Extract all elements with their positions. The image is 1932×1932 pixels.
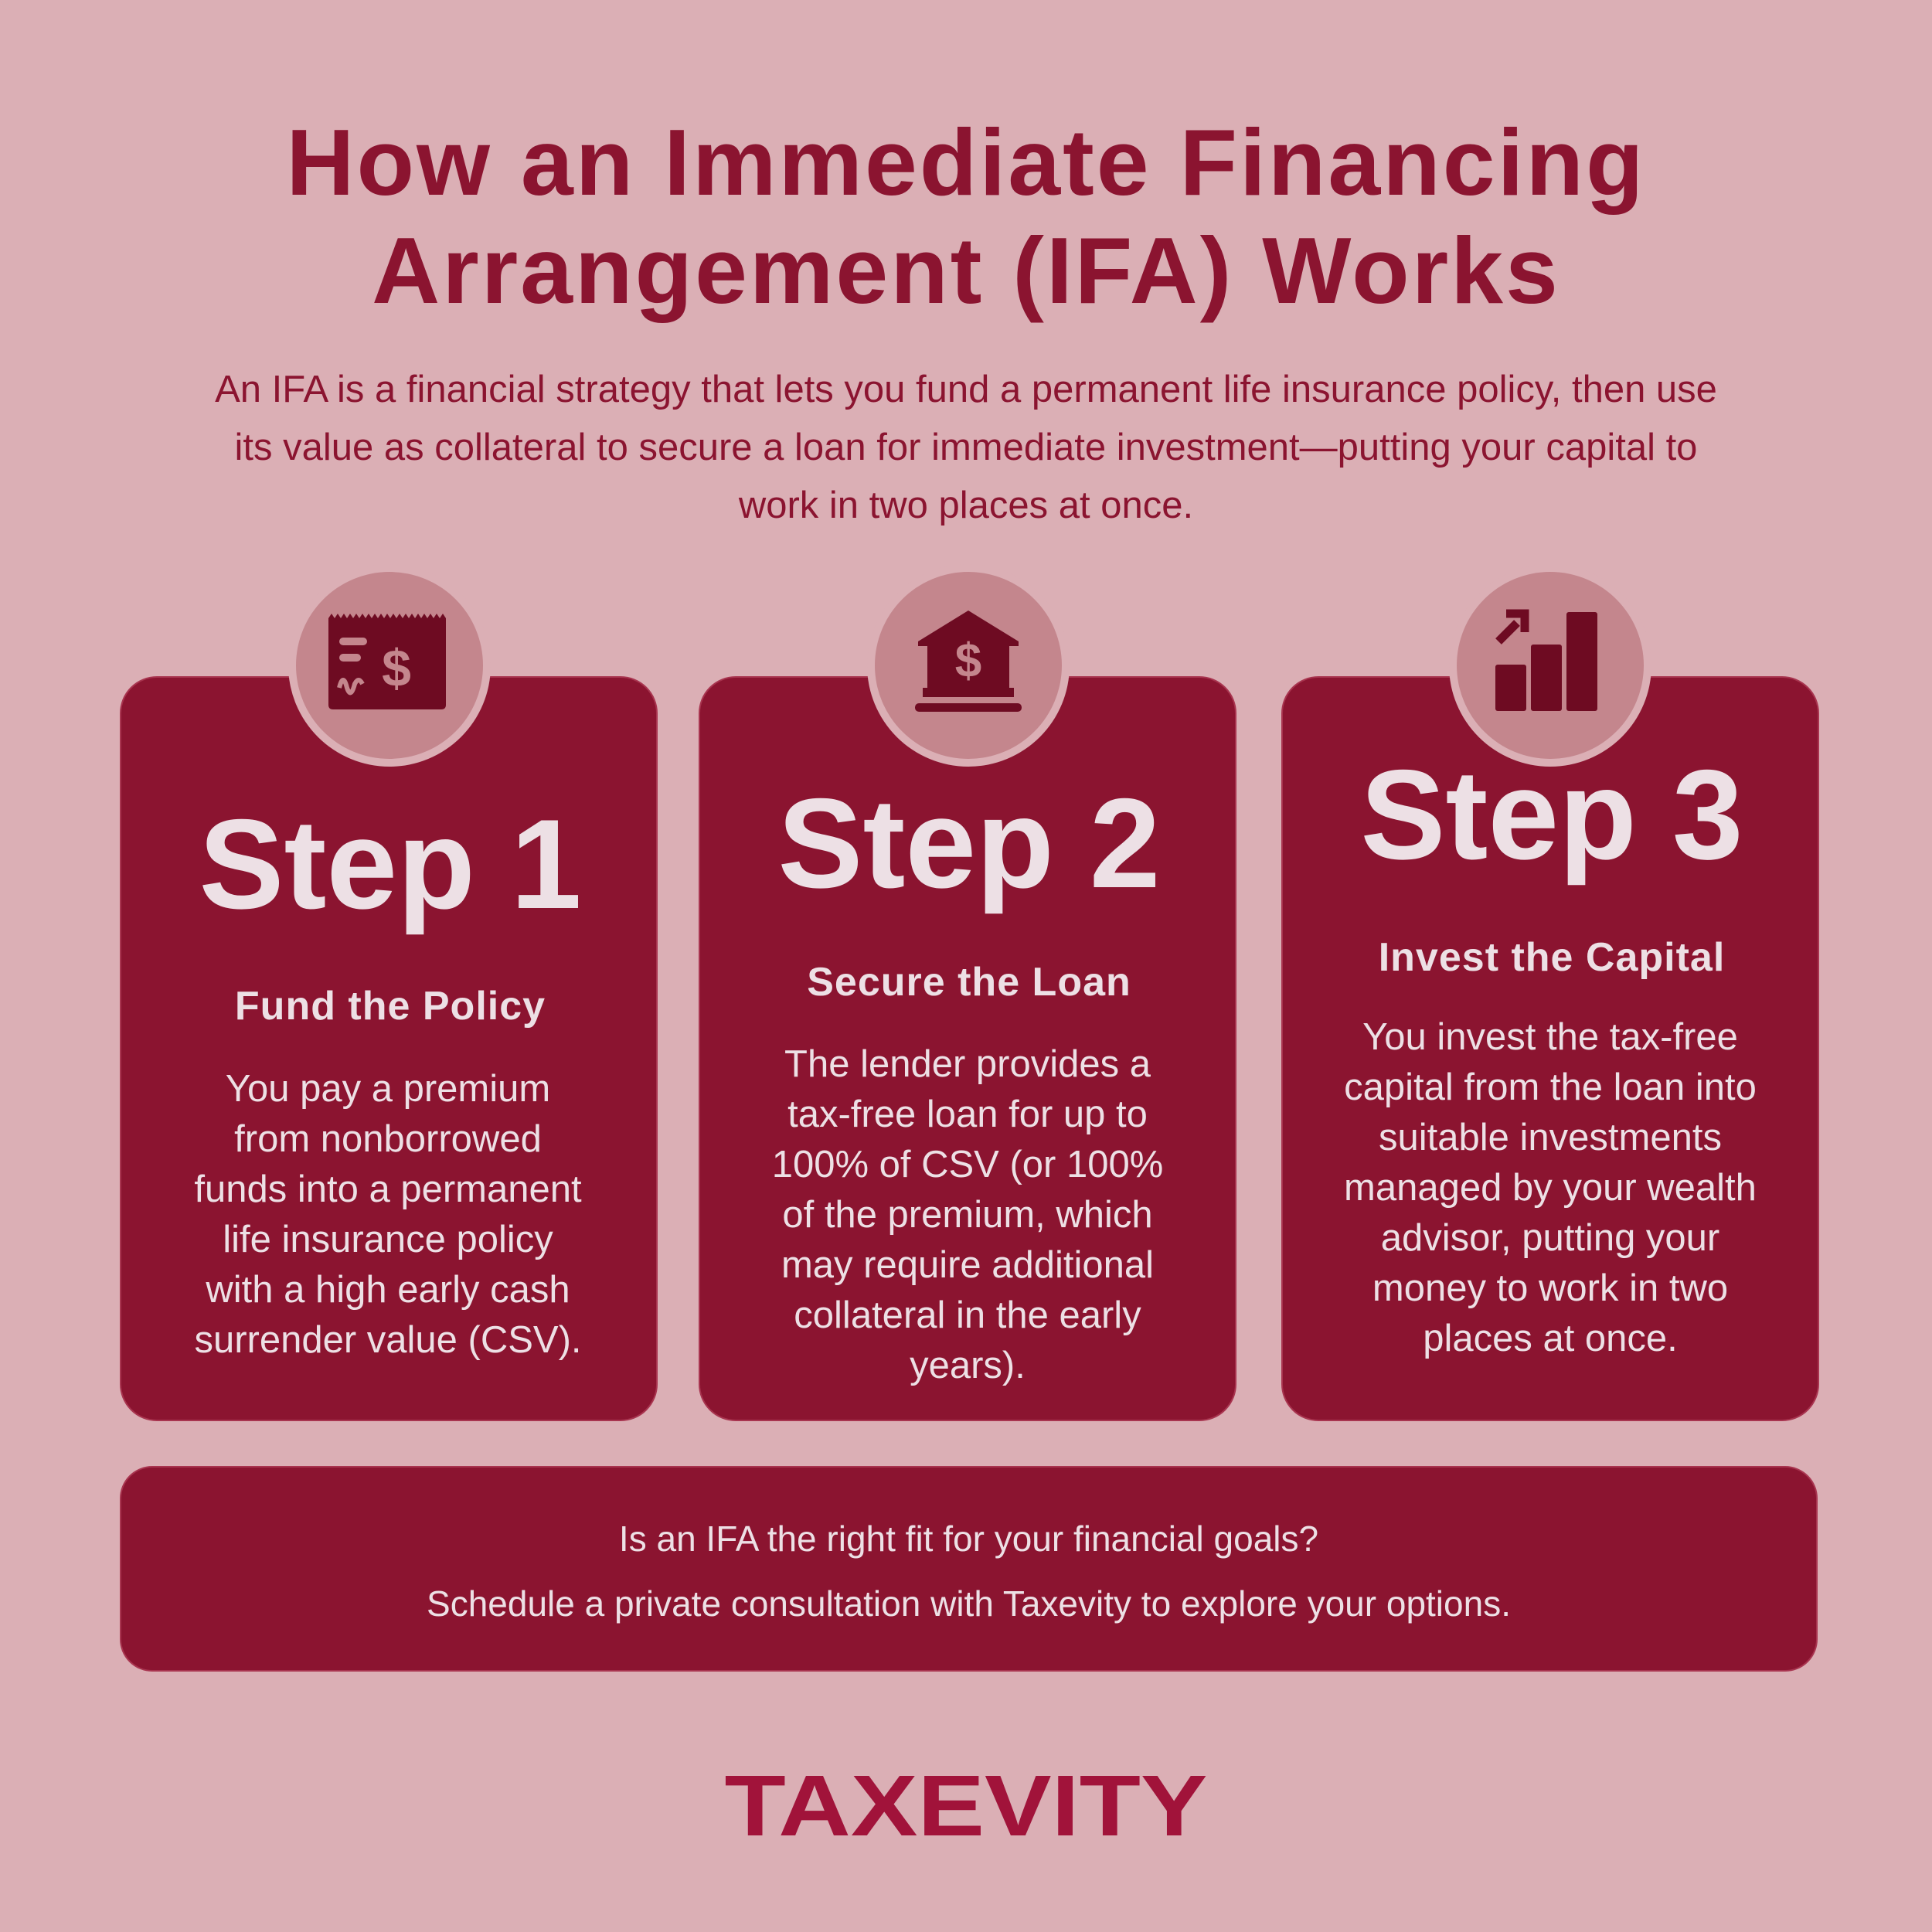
step 2 subheading: Secure the Loan [807,960,1131,1005]
step 2 body: The lender provides a [784,1043,1151,1085]
icon: growth bar chart [1449,564,1651,767]
intro text: work in two places at once. [739,485,1193,526]
step 3 body: You invest the tax-free [1362,1016,1738,1058]
panel: step 2 [699,676,1236,1421]
step 2 body: 100% of CSV (or 100% [772,1144,1163,1185]
step 3 body: managed by your wealth [1344,1167,1757,1209]
step 3 body: money to work in two [1372,1267,1728,1309]
step 3 body: suitable investments [1379,1117,1722,1158]
step 2 body: years). [910,1345,1026,1386]
title: How an Immediate Financing [286,110,1646,215]
call to action box: Schedule a private consultation with Taxevity to explore your options. [427,1583,1511,1624]
title [286,110,1646,323]
step 1 body: with a high early cash [206,1269,570,1311]
step 2 body: may require additional [781,1244,1154,1286]
intro text [215,369,1717,526]
intro text: its value as collateral to secure a loan for immediate investment—putting your capital to [235,427,1697,468]
step 1 subheading: Fund the Policy [235,984,546,1029]
step 1 body: funds into a permanent [194,1168,582,1210]
step 2 body: tax-free loan for up to [787,1094,1148,1135]
step 1 body: You pay a premium [226,1068,550,1110]
icon: receipt with dollar [288,564,491,767]
step 2 body: collateral in the early [794,1294,1141,1336]
step 1 body: from nonborrowed [234,1118,542,1160]
step 3 body: advisor, putting your [1381,1217,1719,1259]
step 1 body: life insurance policy [223,1219,553,1260]
intro text: An IFA is a financial strategy that lets you fund a permanent life insurance policy, then use [215,369,1717,410]
step 3 body: capital from the loan into [1344,1066,1757,1108]
panel: step 1 [120,676,658,1421]
call to action box: Is an IFA the right fit for your financial goals? [619,1519,1318,1559]
step 1 heading: Step 1 [199,793,582,935]
step 1 body: surrender value (CSV). [194,1319,582,1361]
step 3 body [1344,1016,1757,1359]
step 3 body: places at once. [1423,1318,1678,1359]
panel: step 3 [1281,676,1819,1421]
step 1 body [194,1068,582,1361]
step 3 subheading: Invest the Capital [1379,935,1725,980]
step 3 heading: Step 3 [1360,743,1743,886]
icon: receipt with dollar: $ [382,639,411,698]
icon: bank with dollar [867,564,1070,767]
icon: bank with dollar: $ [955,634,981,688]
call to action box [120,1466,1818,1672]
step 2 body: of the premium, which [782,1194,1153,1236]
title: Arrangement (IFA) Works [372,218,1560,323]
step 2 heading: Step 2 [777,772,1161,914]
step 2 body [772,1043,1163,1386]
